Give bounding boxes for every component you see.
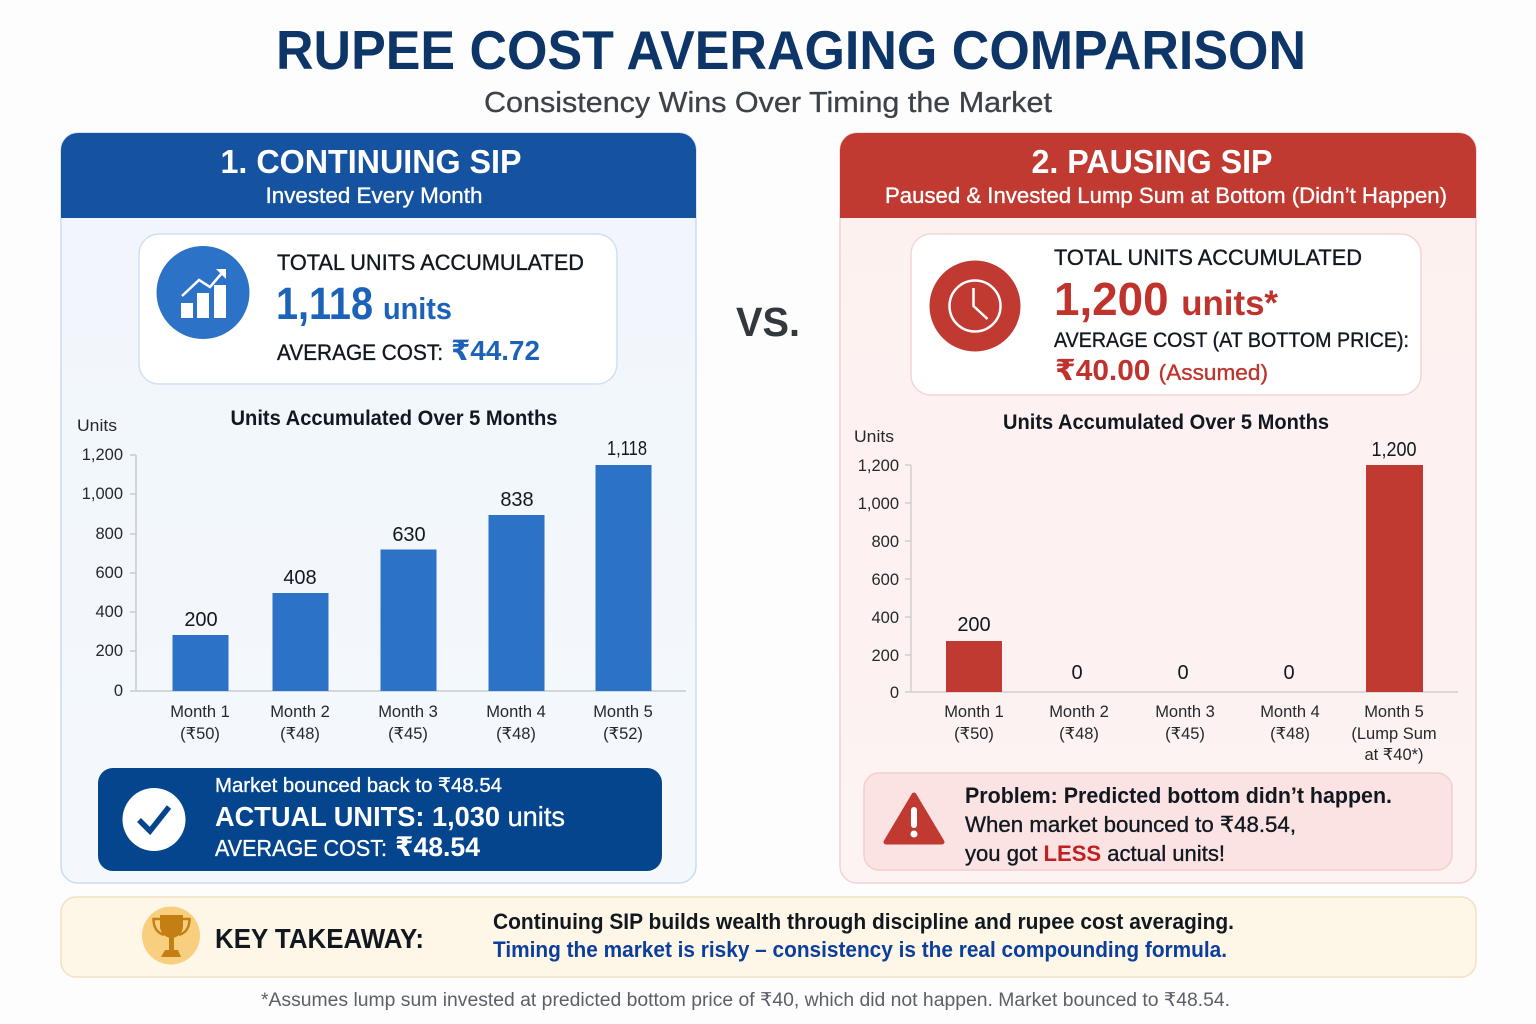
bar chart: continuing SIP: 838 — [500, 489, 534, 511]
panel header: continuing SIP — [61, 133, 696, 218]
value: 1,118 units: units — [383, 291, 452, 326]
callout: actual units: ₹48.54 — [395, 832, 480, 862]
bar chart: continuing SIP: 200 — [95, 642, 123, 660]
bar chart: pausing SIP: 0 — [1283, 662, 1295, 684]
value: 1,118 units — [276, 278, 452, 329]
callout: actual units: ACTUAL UNITS: 1,030 units — [215, 801, 565, 832]
bar chart: continuing SIP: (₹50) — [180, 725, 220, 743]
footnote: *Assumes lump sum invested at predicted bottom price of ₹40, which did not happen. Market bounced to ₹48.54. — [261, 990, 1230, 1011]
average cost: AVERAGE COST (AT BOTTOM PRICE): — [1054, 329, 1409, 352]
bar chart: continuing SIP: 0 — [114, 682, 123, 700]
panel header: continuing SIP: Invested Every Month — [266, 183, 482, 208]
bar chart: continuing SIP: 800 — [95, 525, 123, 543]
bar chart: continuing SIP: 1,000 — [82, 485, 123, 503]
subtitle: Consistency Wins Over Timing the Market — [484, 87, 1052, 119]
callout: problem: Problem: Predicted bottom didn’t happen. — [965, 783, 1392, 808]
icon: clock — [930, 260, 1020, 352]
bar chart: continuing SIP: 630 — [392, 524, 426, 546]
VS label: VS. — [736, 299, 800, 345]
bar chart: pausing SIP: 0 — [1071, 662, 1083, 684]
bar chart: continuing SIP: (₹48) — [496, 725, 536, 743]
chart title: Units Accumulated Over 5 Months — [1003, 411, 1329, 434]
bar chart: continuing SIP: 1,118 — [607, 438, 647, 460]
icon: growth chart — [156, 246, 250, 339]
bar chart: continuing SIP: Month 4 — [486, 703, 546, 721]
stat card: total units — [911, 234, 1421, 395]
bar chart: pausing SIP: Month 2 — [1049, 703, 1109, 721]
bar chart: continuing SIP: 200 — [184, 609, 218, 631]
panel header: pausing SIP: 2. PAUSING SIP — [1032, 143, 1272, 180]
bar chart: pausing SIP: (₹45) — [1165, 725, 1205, 743]
label: key takeaway: KEY TAKEAWAY: — [215, 923, 424, 954]
value: 1,118 units: 1,118 — [276, 278, 373, 329]
bar chart: pausing SIP: 1,200 — [858, 457, 899, 475]
bar chart: continuing SIP: Month 3 — [378, 703, 438, 721]
bar chart: continuing SIP: Month 1 — [170, 703, 230, 721]
bar chart: pausing SIP: (₹48) — [1059, 725, 1099, 743]
price assumed: ₹40.00 (Assumed) — [1055, 355, 1268, 387]
label: total units: TOTAL UNITS ACCUMULATED — [277, 250, 584, 275]
bar chart: pausing SIP: at ₹40*) — [1364, 746, 1424, 764]
average cost — [277, 335, 540, 366]
callout: actual units: AVERAGE COST: — [215, 835, 387, 861]
bar chart: pausing SIP — [854, 411, 1458, 764]
panel: pausing SIP — [840, 133, 1476, 883]
takeaway text: Continuing SIP builds wealth through discipline and rupee cost averaging. — [493, 909, 1234, 934]
bar chart: pausing SIP: 1,200 — [1372, 439, 1416, 461]
icon: check mark — [122, 788, 186, 851]
callout: problem — [864, 773, 1452, 870]
bar chart: pausing SIP: (₹50) — [954, 725, 994, 743]
bar chart: pausing SIP: Units — [854, 428, 894, 446]
key takeaway banner — [61, 897, 1476, 977]
bar chart: continuing SIP: 600 — [95, 564, 123, 582]
bar chart: continuing SIP: Month 5 — [593, 703, 653, 721]
bar chart: pausing SIP: Month 3 — [1155, 703, 1215, 721]
bar chart: continuing SIP: 1,200 — [82, 446, 123, 464]
value: 1,200 units: 1,200 units* — [1054, 273, 1278, 325]
bar chart: continuing SIP: Month 2 — [270, 703, 330, 721]
bar chart: pausing SIP: Month 5 — [1364, 703, 1424, 721]
bar chart: continuing SIP: (₹48) — [280, 725, 320, 743]
bar chart: pausing SIP: 400 — [871, 609, 899, 627]
bar chart: pausing SIP: (Lump Sum — [1351, 725, 1437, 743]
callout: actual units: Market bounced back to ₹48.54 — [215, 775, 502, 797]
bar chart: pausing SIP: 800 — [871, 533, 899, 551]
takeaway text: Timing the market is risky – consistency is the real compounding formula. — [493, 937, 1227, 962]
average cost: AVERAGE COST: — [277, 340, 443, 365]
bar chart: pausing SIP: 200 — [871, 647, 899, 665]
bar chart: continuing SIP — [77, 407, 686, 743]
stat card: total units — [139, 234, 617, 384]
chart title: Units Accumulated Over 5 Months — [230, 407, 558, 430]
takeaway text — [493, 909, 1234, 962]
bar chart: pausing SIP: 200 — [957, 614, 991, 636]
title: RUPEE COST AVERAGING COMPARISON — [276, 19, 1306, 81]
bar chart: pausing SIP: 1,000 — [858, 495, 899, 513]
average cost: ₹44.72 — [451, 335, 540, 366]
panel: continuing SIP — [61, 133, 696, 883]
icon: warning triangle — [886, 795, 942, 842]
label: total units: TOTAL UNITS ACCUMULATED — [1054, 245, 1362, 270]
bar chart: pausing SIP: (₹48) — [1270, 725, 1310, 743]
bar chart: continuing SIP: 408 — [283, 567, 317, 589]
bar chart: pausing SIP: 0 — [1177, 662, 1189, 684]
panel header: pausing SIP — [840, 133, 1476, 218]
callout: actual units — [98, 768, 662, 871]
bar chart: continuing SIP: (₹45) — [388, 725, 428, 743]
bar chart: pausing SIP: Month 4 — [1260, 703, 1320, 721]
bar chart: pausing SIP: Month 1 — [944, 703, 1004, 721]
bar chart: pausing SIP: 600 — [871, 571, 899, 589]
bar chart: continuing SIP: Units — [77, 417, 117, 435]
panel header: pausing SIP: Paused & Invested Lump Sum at Bottom (Didn’t Happen) — [885, 183, 1447, 208]
bar chart: continuing SIP: (₹52) — [603, 725, 643, 743]
bar chart: continuing SIP: 400 — [95, 603, 123, 621]
icon: trophy — [142, 906, 200, 964]
panel header: continuing SIP: 1. CONTINUING SIP — [220, 143, 522, 180]
callout: problem: you got LESS actual units! — [965, 841, 1225, 866]
bar chart: pausing SIP: 0 — [890, 684, 899, 702]
callout: problem: When market bounced to ₹48.54, — [965, 812, 1296, 837]
